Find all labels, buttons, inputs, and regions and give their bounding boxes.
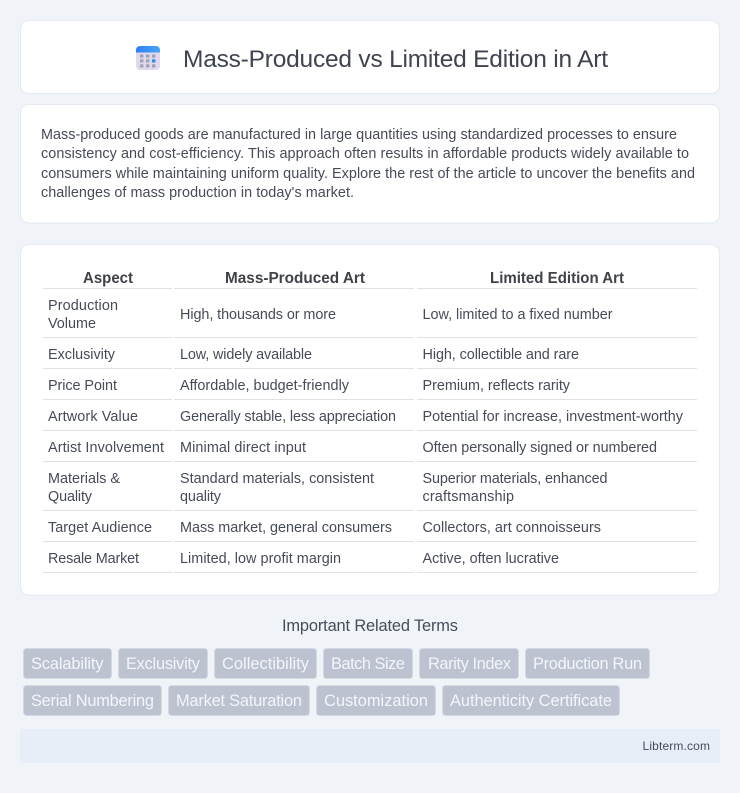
title: Mass-Produced vs Limited Edition in Art — [183, 46, 608, 73]
row: exclusivity: Exclusivity — [48, 347, 116, 363]
row: production volume: Volume — [48, 316, 96, 332]
intro text: consumers while maintaining uniform quality. Explore the rest of the article to uncover the benefits and — [41, 166, 695, 182]
tag: Rarity Index — [420, 648, 518, 678]
intro text: consistency and cost-efficiency. This approach often results in affordable products widely available to — [41, 146, 689, 162]
row: artwork value — [48, 409, 684, 425]
row: materials and quality: Quality — [48, 489, 93, 505]
row: production volume: High, thousands or more — [180, 307, 336, 323]
tag: Serial Numbering: Serial Numbering — [31, 692, 154, 710]
row: materials and quality: craftsmanship — [422, 489, 514, 505]
tag: Customization — [316, 686, 436, 716]
row: artwork value: Artwork Value — [48, 409, 138, 425]
row: price point — [48, 378, 571, 394]
related term tags — [24, 648, 650, 716]
row: artist involvement: Minimal direct input — [180, 440, 306, 456]
heading: related terms: Important Related Terms — [282, 617, 458, 635]
tag: Authenticity Certificate — [442, 686, 620, 716]
row: price point: Affordable, budget-friendly — [180, 378, 350, 394]
tag: Rarity Index: Rarity Index — [428, 655, 512, 673]
row: materials and quality: quality — [180, 489, 222, 505]
row: production volume: Production — [48, 298, 118, 314]
tag: Exclusivity — [118, 648, 208, 678]
row: materials and quality: Superior materials, enhanced — [422, 471, 608, 487]
row: target audience: Mass market, general consumers — [180, 520, 392, 536]
icon: calendar — [136, 46, 160, 70]
tag: Collectibility — [214, 648, 316, 678]
intro text: challenges of mass production in today's market. — [41, 185, 354, 201]
intro text — [41, 127, 695, 201]
row: target audience: Collectors, art connoisseurs — [422, 520, 601, 536]
row: target audience — [48, 520, 601, 536]
row: exclusivity: High, collectible and rare — [422, 347, 579, 363]
row: materials and quality — [48, 471, 608, 505]
tag: Production Run: Production Run — [533, 655, 642, 673]
row: resale market — [48, 551, 559, 567]
tag: Batch Size — [324, 648, 412, 678]
row: price point: Premium, reflects rarity — [422, 378, 571, 394]
row: resale market: Active, often lucrative — [422, 551, 559, 567]
tag: Production Run — [526, 648, 650, 678]
tag: Batch Size: Batch Size — [331, 655, 405, 673]
table header row: Limited Edition Art — [490, 270, 625, 287]
tag: Market Saturation: Market Saturation — [176, 692, 302, 710]
row: artist involvement — [48, 440, 657, 456]
row: production volume: Low, limited to a fixed number — [422, 307, 613, 323]
row: artwork value: Potential for increase, investment-worthy — [422, 409, 684, 425]
table header row — [83, 270, 625, 287]
tag: Customization: Customization — [324, 692, 428, 710]
tag: Market Saturation — [168, 686, 310, 716]
row: target audience: Target Audience — [48, 520, 152, 536]
footer bar — [20, 729, 720, 763]
row: exclusivity: Low, widely available — [180, 347, 312, 363]
table header row: Mass-Produced Art — [225, 270, 366, 287]
tag: Serial Numbering — [24, 686, 162, 716]
row: price point: Price Point — [48, 378, 117, 394]
tag: Scalability — [24, 648, 112, 678]
intro text: Mass-produced goods are manufactured in large quantities using standardized processes to ensure — [41, 127, 677, 143]
table rules — [43, 288, 697, 573]
tag: Scalability: Scalability — [31, 655, 104, 673]
tag: Collectibility: Collectibility — [222, 655, 310, 673]
tag: Authenticity Certificate: Authenticity Certificate — [450, 692, 612, 710]
panel: header — [20, 20, 720, 94]
panel: comparison table — [20, 244, 720, 595]
row: production volume — [48, 298, 613, 332]
row: resale market: Limited, low profit margin — [180, 551, 341, 567]
row: artist involvement: Artist Involvement — [48, 440, 164, 456]
row: materials and quality: Standard materials, consistent — [180, 471, 374, 487]
row: materials and quality: Materials & — [48, 471, 120, 487]
row: artwork value: Generally stable, less appreciation — [180, 409, 396, 425]
panel: introduction — [20, 104, 720, 223]
row: exclusivity — [48, 347, 579, 363]
footer credit: Libterm.com — [642, 739, 710, 753]
tag: Exclusivity: Exclusivity — [126, 655, 201, 673]
table header row: Aspect — [83, 270, 134, 287]
row: artist involvement: Often personally signed or numbered — [422, 440, 657, 456]
row: resale market: Resale Market — [48, 551, 139, 567]
